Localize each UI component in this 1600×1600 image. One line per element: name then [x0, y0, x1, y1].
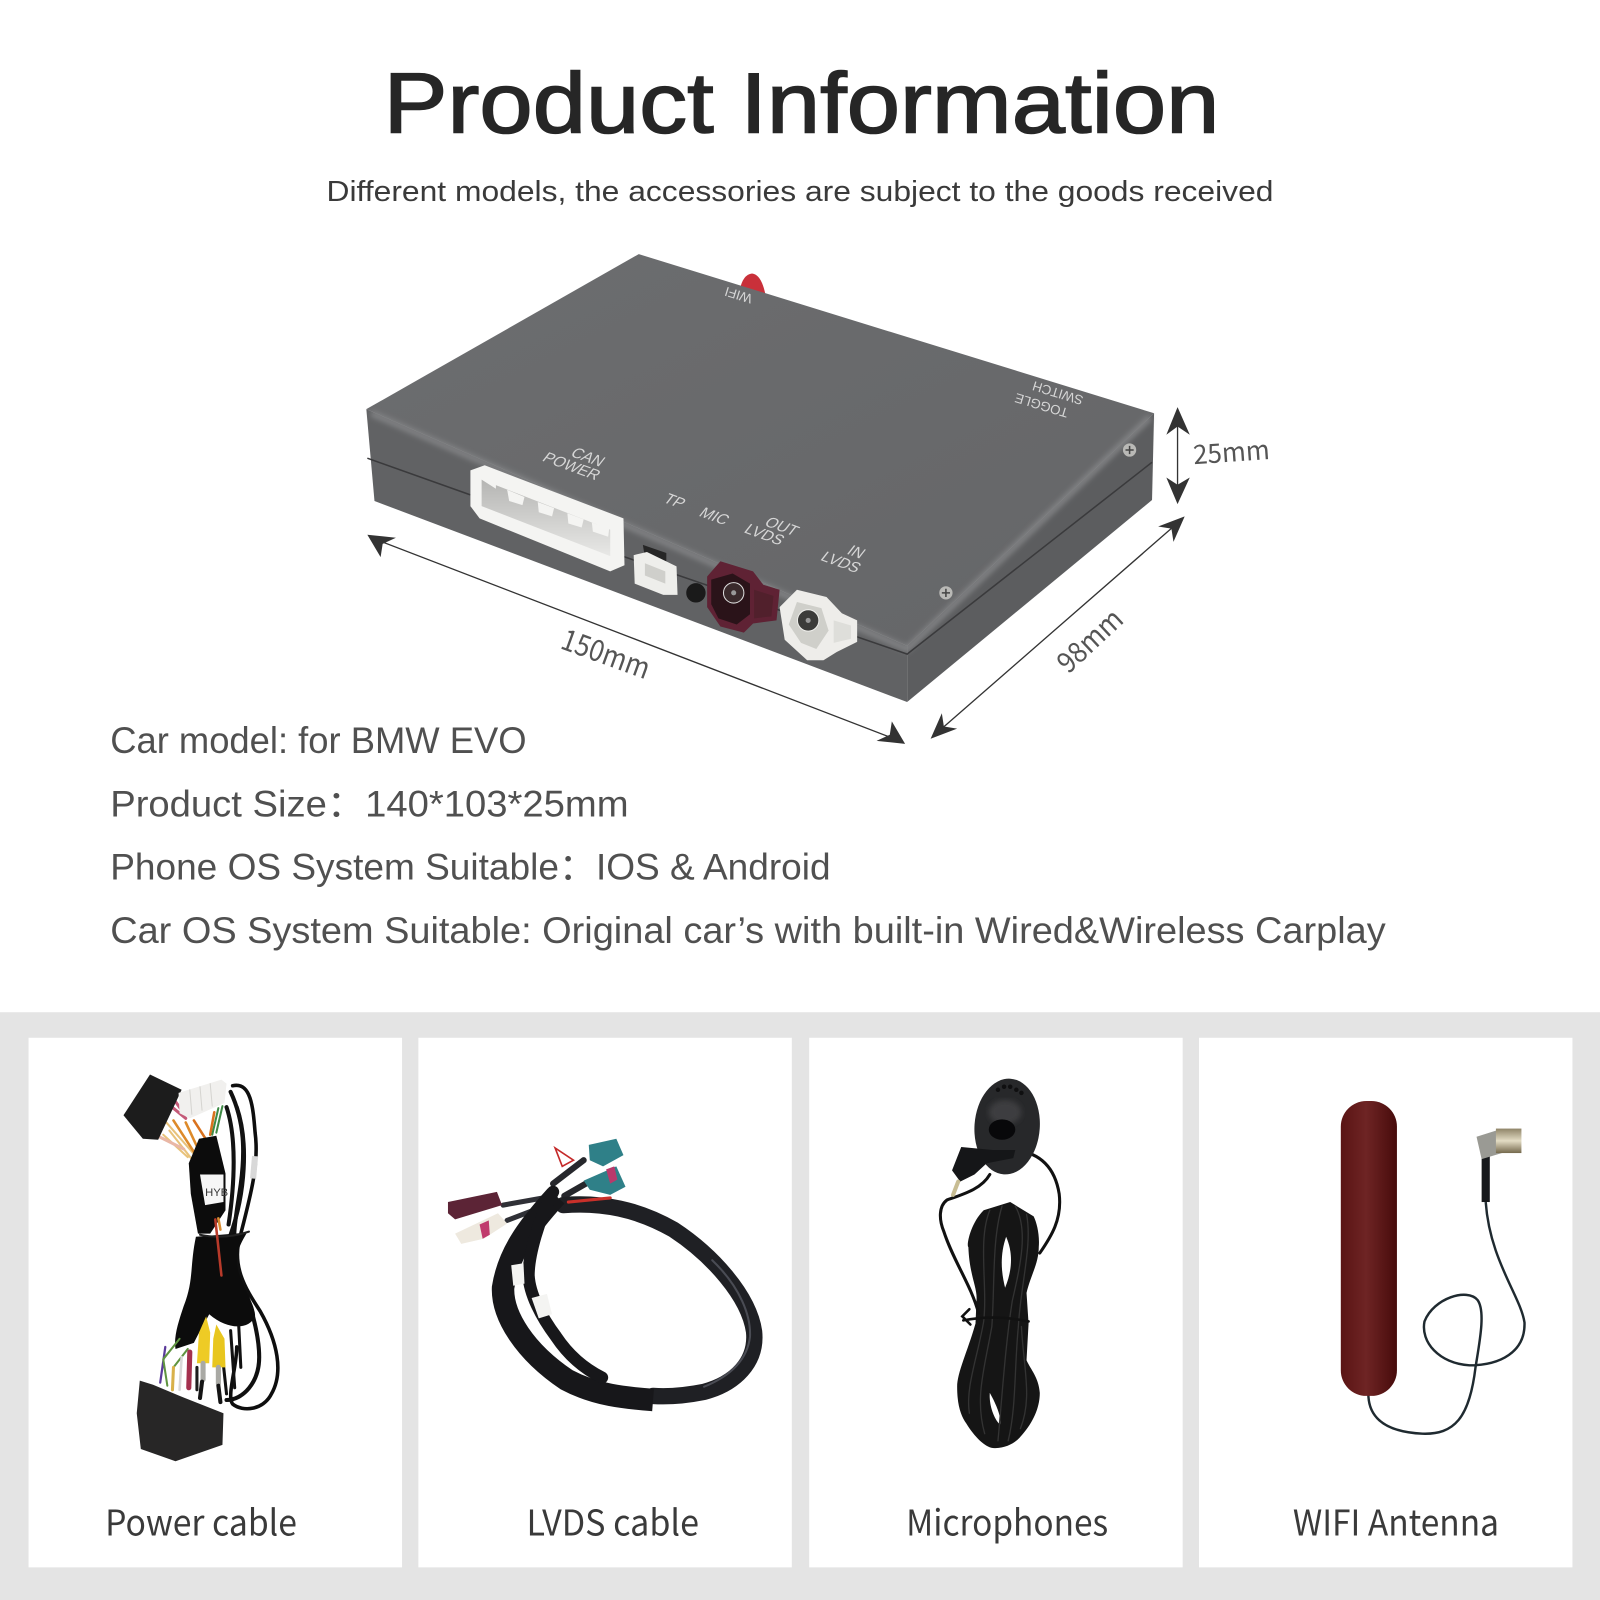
white LVDS IN connector [780, 590, 857, 660]
illustration: wifi antenna [1341, 1101, 1525, 1434]
port labels: LVDS [817, 549, 864, 576]
25mm label: 25mm [1192, 428, 1271, 472]
TP connector [634, 545, 678, 595]
main sleeve [189, 1136, 226, 1234]
label: LVDS cable [527, 1496, 699, 1547]
colored wires [160, 1339, 197, 1390]
product specification text: Car model: for BMW EVO [110, 720, 527, 761]
white power connector [470, 465, 624, 571]
cable [940, 1150, 1060, 1313]
arrow: height 25mm [1166, 407, 1190, 504]
150mm label: 150mm [556, 616, 657, 688]
illustration: power cable harness: HYB [205, 1187, 228, 1199]
accessories band [0, 1012, 1600, 1600]
port labels: IN [843, 543, 868, 562]
coil strands [969, 1206, 1028, 1441]
teal connectors [589, 1139, 623, 1166]
port labels: WIFI [723, 284, 754, 306]
port labels: LVDS [740, 522, 788, 549]
port labels: CAN [567, 445, 608, 470]
coil [957, 1202, 1040, 1448]
box right face [907, 413, 1154, 702]
left sleeve [503, 1196, 653, 1400]
maroon connector [448, 1192, 502, 1219]
title: Product Information [384, 56, 1219, 152]
product specification text: Car OS System Suitable: Original car’s with built-in Wired&Wireless Carplay [110, 910, 1386, 951]
label: WIFI Antenna [1293, 1496, 1499, 1547]
panel: WIFI antenna [1199, 1038, 1572, 1567]
foam connector [137, 1381, 223, 1461]
port labels: OUT [761, 515, 802, 539]
product specification text: Product Size：140*103*25mm [110, 783, 629, 824]
port labels: MIC [696, 505, 733, 528]
white connector [179, 1080, 227, 1118]
black connector [123, 1074, 182, 1140]
label: Microphones [906, 1496, 1108, 1547]
box front face [366, 409, 907, 702]
label tag [200, 1174, 223, 1205]
product box illustration [366, 254, 1271, 744]
capsule holes [996, 1084, 1024, 1095]
panel: power cable [29, 1038, 402, 1567]
port labels [539, 284, 1085, 576]
SMA connector [1477, 1129, 1521, 1202]
thin cable leads [503, 1198, 543, 1220]
yellow RCA plugs [197, 1316, 210, 1363]
wire bundles from connectors [163, 1122, 195, 1159]
tie and inner wires [200, 1232, 249, 1237]
port labels: POWER [539, 450, 604, 484]
illustration: power cable harness [123, 1074, 278, 1461]
port labels: TOGGLE [1013, 390, 1070, 421]
label: Power cable [105, 1496, 297, 1547]
lower sleeve mass [175, 1233, 255, 1349]
screws [939, 443, 1136, 599]
MIC jack [686, 583, 706, 603]
right loop [563, 1204, 754, 1396]
antenna body [1341, 1101, 1397, 1396]
98mm label: 98mm [1047, 598, 1131, 681]
red wire [568, 1198, 610, 1202]
product specification text [110, 720, 1386, 951]
subtitle: Different models, the accessories are subject to the goods received [327, 176, 1273, 208]
illustration: LVDS cable loop [448, 1139, 754, 1400]
arrow: length 150mm [367, 535, 905, 744]
capsule [971, 1076, 1043, 1177]
white connector [455, 1213, 507, 1244]
inner strand [529, 1192, 602, 1378]
panel: LVDS cable [418, 1038, 792, 1567]
product specification text: Phone OS System Suitable：IOS & Android [110, 847, 831, 888]
thin black cables [231, 1085, 278, 1409]
icon: red wifi antenna stub [740, 273, 765, 294]
coil openings [1002, 1237, 1011, 1288]
white tags [511, 1263, 524, 1286]
port labels: SWITCH [1031, 378, 1085, 408]
tie [963, 1318, 1029, 1321]
plug [952, 1147, 1015, 1182]
panel: microphones [809, 1038, 1183, 1567]
maroon LVDS OUT connector [707, 561, 780, 633]
box top face [366, 254, 1154, 646]
arrow: width 98mm [931, 516, 1185, 739]
illustration: microphone [940, 1076, 1060, 1448]
port labels: TP [660, 491, 689, 512]
